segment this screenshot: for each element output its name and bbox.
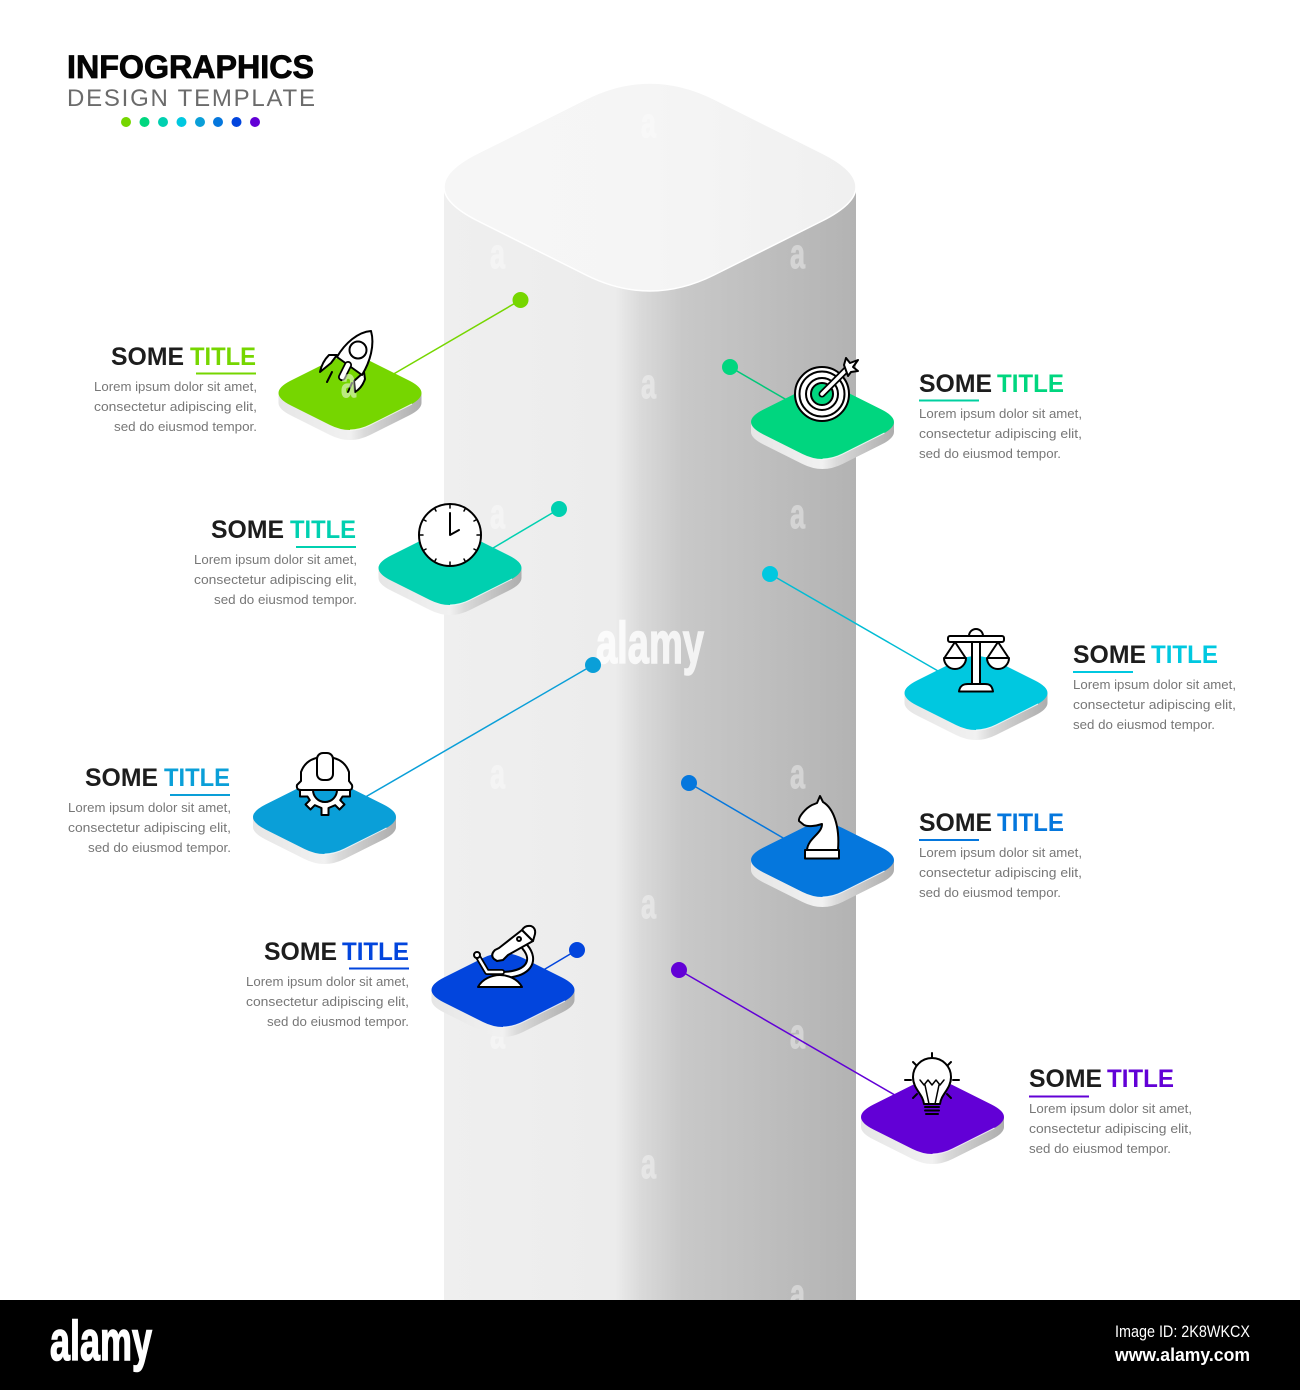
connector bbox=[681, 775, 790, 842]
description bbox=[1029, 1101, 1192, 1156]
description: sed do eiusmod tempor. bbox=[919, 885, 1061, 900]
description: consectetur adipiscing elit, bbox=[94, 399, 257, 414]
watermark letters on column: a bbox=[790, 1010, 805, 1057]
description: consectetur adipiscing elit, bbox=[246, 994, 409, 1009]
description: Lorem ipsum dolor sit amet, bbox=[919, 406, 1082, 421]
description: Lorem ipsum dolor sit amet, bbox=[246, 974, 409, 989]
title bbox=[264, 938, 409, 970]
central isometric column bbox=[444, 187, 856, 1300]
description: consectetur adipiscing elit, bbox=[194, 572, 357, 587]
title: TITLE bbox=[290, 516, 356, 544]
watermark letters on column: a bbox=[790, 490, 805, 537]
connector bbox=[488, 501, 567, 551]
step: light blue helmet bbox=[68, 657, 601, 864]
title: SOME bbox=[85, 764, 158, 792]
platform bbox=[278, 356, 422, 440]
title: SOME bbox=[111, 343, 184, 371]
step: teal clock bbox=[194, 501, 567, 615]
description: sed do eiusmod tempor. bbox=[919, 446, 1061, 461]
column top cap bbox=[444, 83, 856, 291]
watermark letters on column: a bbox=[790, 230, 805, 277]
description: consectetur adipiscing elit, bbox=[68, 820, 231, 835]
title: TITLE bbox=[997, 370, 1064, 398]
title bbox=[919, 370, 1064, 402]
icon: clock bbox=[419, 504, 481, 566]
icon: rocket bbox=[320, 331, 372, 392]
watermark letters on column bbox=[490, 99, 805, 1317]
connector bbox=[362, 657, 601, 799]
title: TITLE bbox=[1151, 641, 1218, 669]
title bbox=[1073, 641, 1218, 673]
watermark letters on column: a bbox=[641, 880, 656, 927]
title: TITLE bbox=[342, 938, 409, 966]
title block bbox=[67, 49, 315, 127]
step: blue knight bbox=[681, 775, 1082, 907]
connector bbox=[671, 962, 900, 1098]
step: cyan scales bbox=[762, 566, 1236, 740]
description bbox=[194, 552, 357, 607]
platform bbox=[751, 385, 894, 469]
platform bbox=[253, 780, 396, 864]
title bbox=[85, 764, 230, 796]
description: sed do eiusmod tempor. bbox=[114, 419, 257, 434]
title bbox=[919, 809, 1064, 841]
description: sed do eiusmod tempor. bbox=[88, 840, 231, 855]
watermark letters on column: a bbox=[490, 230, 505, 277]
platform bbox=[378, 531, 522, 615]
colour dots bbox=[121, 117, 260, 127]
description: Lorem ipsum dolor sit amet, bbox=[1029, 1101, 1192, 1116]
subheading: DESIGN TEMPLATE bbox=[67, 85, 315, 112]
title: TITLE bbox=[190, 343, 256, 371]
description bbox=[1073, 677, 1236, 732]
description: sed do eiusmod tempor. bbox=[267, 1014, 409, 1029]
watermark letters on column: a bbox=[490, 750, 505, 797]
icon: chess knight bbox=[799, 796, 839, 858]
title: TITLE bbox=[997, 809, 1064, 837]
description: sed do eiusmod tempor. bbox=[1073, 717, 1215, 732]
platform bbox=[861, 1080, 1004, 1164]
icon: helmet and gear bbox=[297, 753, 352, 815]
title bbox=[211, 516, 356, 548]
watermark letters on column: a bbox=[641, 99, 656, 146]
description bbox=[246, 974, 409, 1029]
description: Lorem ipsum dolor sit amet, bbox=[68, 800, 231, 815]
title: TITLE bbox=[1107, 1065, 1174, 1093]
icon: target bbox=[795, 358, 858, 421]
footer logo: alamy bbox=[50, 1309, 152, 1372]
description: consectetur adipiscing elit, bbox=[919, 426, 1082, 441]
description: Lorem ipsum dolor sit amet, bbox=[1073, 677, 1236, 692]
description bbox=[919, 406, 1082, 461]
description: sed do eiusmod tempor. bbox=[1029, 1141, 1171, 1156]
description bbox=[68, 800, 231, 855]
description bbox=[94, 379, 257, 434]
step: royal blue microscope bbox=[246, 926, 585, 1037]
watermark letters on column: a bbox=[790, 750, 805, 797]
connector bbox=[540, 942, 585, 972]
description: consectetur adipiscing elit, bbox=[919, 865, 1082, 880]
description: consectetur adipiscing elit, bbox=[1029, 1121, 1192, 1136]
icon: microscope bbox=[474, 926, 535, 987]
step: green rocket bbox=[94, 292, 528, 440]
connector bbox=[762, 566, 945, 675]
step: emerald target bbox=[722, 358, 1082, 469]
image id: Image ID: 2K8WKCX bbox=[1115, 1322, 1250, 1341]
watermark letters on column: a bbox=[490, 490, 505, 537]
platform bbox=[751, 823, 894, 907]
watermark letters on column: a bbox=[490, 1010, 505, 1057]
website: www.alamy.com bbox=[1114, 1345, 1250, 1365]
description: Lorem ipsum dolor sit amet, bbox=[94, 379, 257, 394]
icon: lightbulb bbox=[905, 1053, 959, 1114]
title bbox=[111, 343, 256, 374]
watermark on tile: a bbox=[341, 359, 356, 406]
description: Lorem ipsum dolor sit amet, bbox=[919, 845, 1082, 860]
title: SOME bbox=[1073, 641, 1146, 669]
watermark letters on column: a bbox=[641, 360, 656, 407]
title: SOME bbox=[919, 370, 992, 398]
watermark letters on column: a bbox=[790, 1270, 805, 1317]
icon: scales bbox=[944, 629, 1009, 692]
title: SOME bbox=[919, 809, 992, 837]
platform bbox=[904, 656, 1048, 740]
watermark letters on column: a bbox=[641, 1140, 656, 1187]
description: sed do eiusmod tempor. bbox=[214, 592, 357, 607]
description bbox=[919, 845, 1082, 900]
platform bbox=[432, 953, 574, 1037]
description: Lorem ipsum dolor sit amet, bbox=[194, 552, 357, 567]
title: SOME bbox=[1029, 1065, 1102, 1093]
description: consectetur adipiscing elit, bbox=[1073, 697, 1236, 712]
footer bar bbox=[0, 1300, 1300, 1390]
step: purple lightbulb bbox=[671, 962, 1192, 1164]
connector bbox=[722, 359, 792, 403]
watermark wordmark: alamy bbox=[596, 611, 704, 676]
title: TITLE bbox=[164, 764, 230, 792]
title: SOME bbox=[211, 516, 284, 544]
title: SOME bbox=[264, 938, 337, 966]
connector bbox=[385, 292, 528, 379]
heading: INFOGRAPHICS bbox=[67, 49, 314, 85]
title bbox=[1029, 1065, 1174, 1098]
